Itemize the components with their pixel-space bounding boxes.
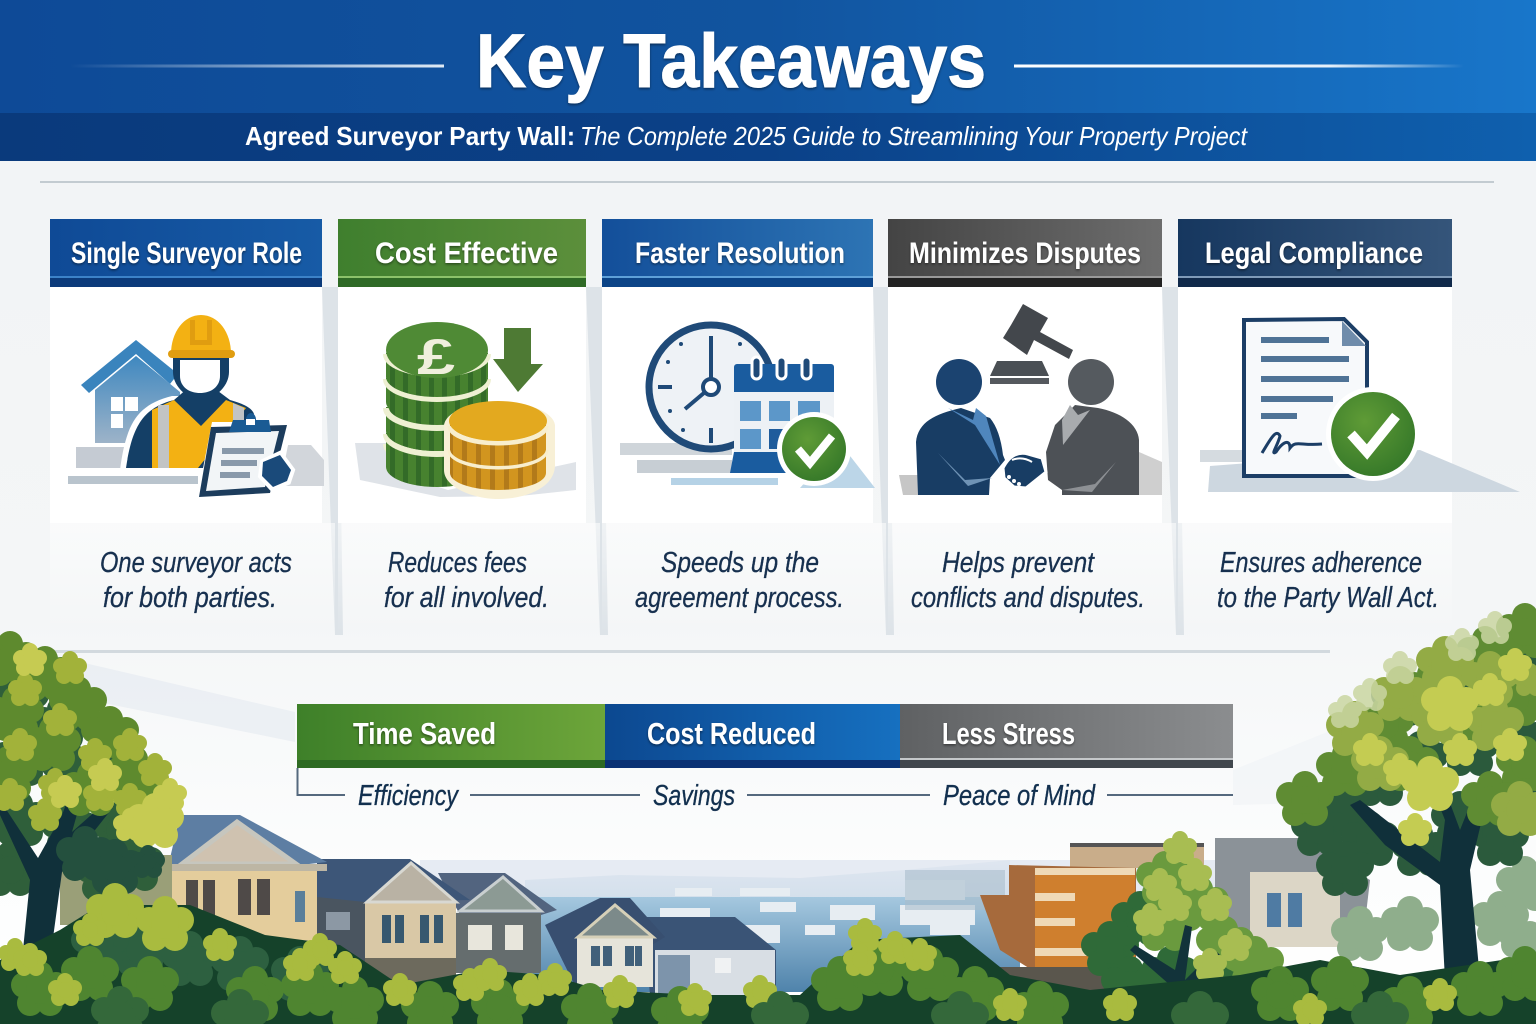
heading: Cost Effective: [375, 237, 558, 270]
panel: single surveyor role: [50, 219, 343, 635]
description: One surveyor acts: [100, 547, 292, 579]
description: conflicts and disputes.: [911, 582, 1145, 614]
house E: [643, 917, 776, 996]
house: right grey: [1215, 838, 1370, 947]
icon: coin stacks with down arrow: £: [417, 329, 455, 385]
house D: [545, 898, 665, 990]
neighbourhood skyline: [165, 815, 1370, 996]
description: Ensures adherence: [1220, 547, 1422, 579]
centre-right tree: [1081, 831, 1284, 1024]
panel: faster resolution: [602, 219, 894, 635]
subtitle: Agreed Surveyor Party Wall:: [245, 121, 575, 151]
right tree: [1276, 603, 1536, 980]
heading: Legal Compliance: [1205, 237, 1423, 270]
left tree: [0, 631, 187, 960]
subtitle: The Complete 2025 Guide to Streamlining Your Property Project: [580, 121, 1249, 151]
panel: cost effective: [338, 219, 608, 635]
foreground hedge: [0, 883, 1536, 1024]
heading: Single Surveyor Role: [71, 237, 302, 270]
bar sub-labels: Savings: [653, 780, 735, 812]
icon: gavel and handshake: [899, 304, 1162, 495]
segment: cost reduced: [605, 704, 900, 768]
benefits bar: [297, 704, 1233, 768]
bar sub-labels: [298, 768, 1233, 812]
description: Reduces fees: [388, 547, 527, 579]
segment: less stress: Less Stress: [942, 716, 1075, 751]
description: [100, 547, 292, 614]
icon: signed document with check: [1200, 319, 1520, 492]
title: Key Takeaways: [476, 19, 986, 104]
bar sub-labels: Efficiency: [358, 780, 459, 812]
segment: time saved: [297, 704, 605, 768]
house A: [165, 815, 327, 968]
icon: coin stacks with down arrow: [355, 322, 576, 499]
description: [635, 547, 844, 614]
description: Speeds up the: [661, 547, 819, 579]
description: [1217, 547, 1439, 614]
heading: Minimizes Disputes: [909, 237, 1141, 270]
segment: less stress: [900, 704, 1233, 768]
panel: legal compliance: [1178, 219, 1520, 633]
description: for all involved.: [384, 582, 549, 614]
house C: [438, 873, 557, 973]
segment: time saved: Time Saved: [353, 716, 496, 751]
description: [384, 547, 549, 614]
brick building: [980, 843, 1204, 992]
description: to the Party Wall Act.: [1217, 582, 1439, 614]
panel: minimizes disputes: [888, 219, 1184, 635]
header banner: [0, 0, 1536, 161]
description: [911, 547, 1145, 614]
segment: cost reduced: Cost Reduced: [647, 716, 816, 751]
heading: Faster Resolution: [635, 237, 845, 270]
bar sub-labels: Peace of Mind: [943, 780, 1096, 812]
description: Helps prevent: [942, 547, 1096, 579]
icon: clock, calendar and check: [620, 325, 875, 488]
icon: surveyor with house and clipboard: [68, 315, 324, 499]
description: for both parties.: [103, 582, 277, 614]
scenery sky haze: [0, 650, 1420, 805]
house B: [317, 859, 470, 983]
description: agreement process.: [635, 582, 844, 614]
